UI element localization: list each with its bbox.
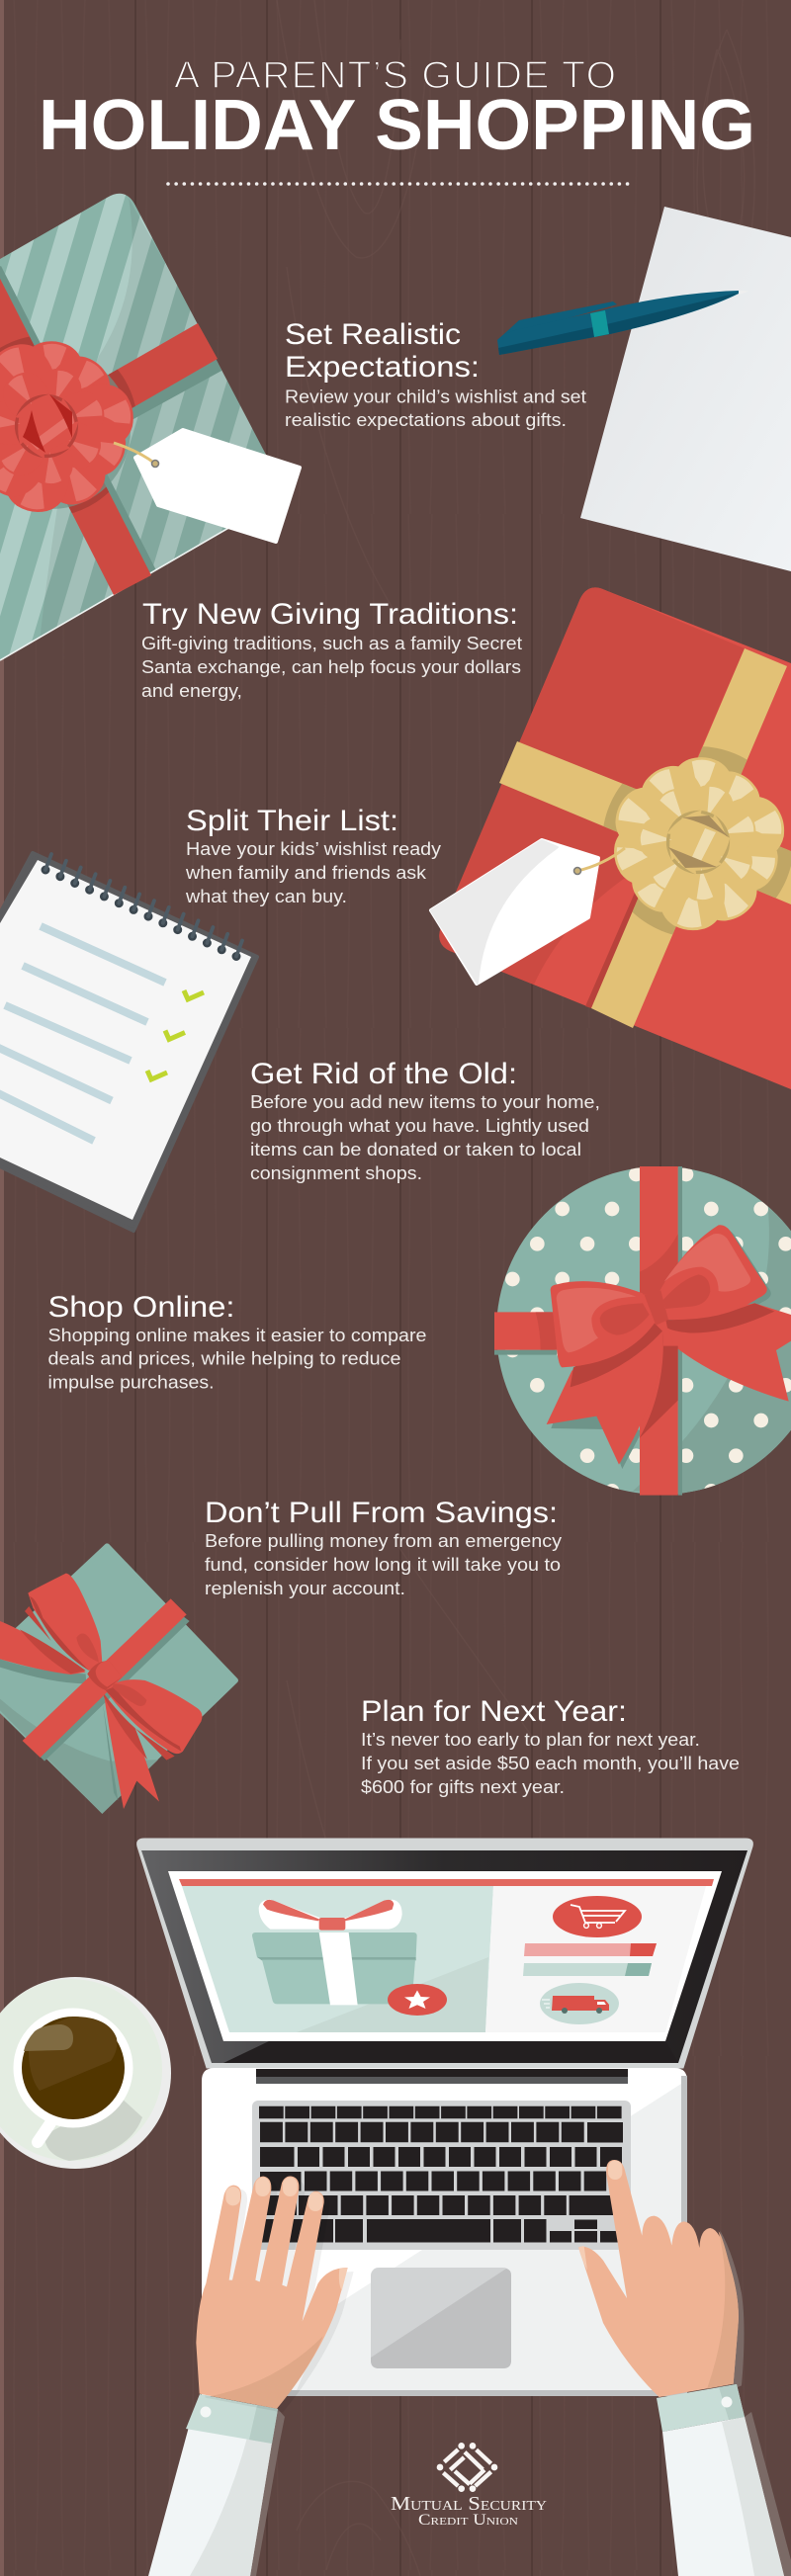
- lower bow loop: [106, 1679, 202, 1754]
- body text: Review your child’s wishlist and set: [285, 387, 586, 407]
- body text: items can be donated or taken to local: [250, 1140, 581, 1159]
- gift tag: [135, 430, 300, 542]
- body text: [185, 839, 441, 906]
- body text: If you set aside $50 each month, you’ll have: [361, 1754, 740, 1773]
- title: [39, 54, 755, 165]
- gift body: [439, 587, 791, 1089]
- gold ribbon: [499, 648, 791, 1028]
- gold bow: [606, 755, 791, 933]
- spiral binding: [45, 854, 242, 957]
- tip: set realistic expectations: [285, 318, 586, 430]
- logo mark: [437, 2443, 497, 2492]
- laptop: [137, 1839, 752, 2396]
- body text: Gift-giving traditions, such as a family Secret: [141, 634, 522, 653]
- heading: Don’t Pull From Savings:: [205, 1497, 558, 1529]
- cart icon badge: [553, 1896, 642, 1937]
- tip: try new giving traditions: [141, 598, 522, 701]
- heading: [285, 318, 480, 384]
- bow shadow: [668, 1232, 771, 1321]
- gift body: [0, 1546, 235, 1810]
- coffee cup on saucer: [0, 1977, 171, 2169]
- tag string: [114, 443, 155, 464]
- screen bezel: [141, 1850, 747, 2063]
- heading: Shop Online:: [47, 1291, 235, 1324]
- keyboard: [252, 2101, 631, 2250]
- body text: realistic expectations about gifts.: [285, 410, 567, 430]
- back loops: [25, 1606, 175, 1760]
- right cuff: [657, 2384, 745, 2432]
- hinge: [256, 2069, 628, 2084]
- right sleeve: [662, 2417, 784, 2576]
- body text: [205, 1531, 562, 1598]
- ribbon band: [23, 1598, 187, 1758]
- heading: Split Their List:: [186, 805, 398, 837]
- laptop screen frame: [137, 1839, 752, 2068]
- body text: impulse purchases.: [47, 1372, 214, 1392]
- tip: split their list: [185, 805, 441, 906]
- polka dots: [505, 1167, 791, 1499]
- gift body: [0, 194, 287, 660]
- gold ribbon shadow: [585, 870, 651, 1008]
- ribbon shadows: [0, 1616, 190, 1801]
- red gift with gold bow: [431, 587, 791, 1089]
- body text: Before you add new items to your home,: [250, 1092, 600, 1112]
- left ribbon tail: [0, 1621, 86, 1674]
- striped gift with red bow: [0, 194, 300, 660]
- cup: [14, 2009, 132, 2127]
- left sleeve: [148, 2427, 272, 2576]
- vertical and horizontal ribbon: [494, 1166, 678, 1496]
- trackpad: [371, 2268, 511, 2368]
- heading: Plan for Next Year:: [361, 1695, 627, 1728]
- left sleeve shadow: [250, 2409, 285, 2576]
- bow knot: [87, 1661, 122, 1690]
- paper sheet and pen: [497, 207, 791, 571]
- right ribbon tail: [665, 1303, 791, 1402]
- right hand: [578, 2160, 744, 2397]
- body text: It’s never too early to plan for next year.: [361, 1730, 700, 1750]
- left hand and sleeve: [148, 2177, 354, 2576]
- pen: [497, 291, 749, 355]
- screen right panel: [485, 1886, 706, 2032]
- heading: Set Realistic: [285, 318, 461, 351]
- logo name: Mutual Security: [391, 2493, 547, 2515]
- tip: get rid of the old: [250, 1058, 600, 1183]
- heading: Expectations:: [285, 351, 480, 384]
- body text: what they can buy.: [185, 887, 347, 906]
- tip: don't pull from savings: [205, 1497, 562, 1598]
- title line: holiday shopping: HOLIDAY SHOPPING: [39, 86, 755, 165]
- ribbon shadows: [494, 1166, 682, 1496]
- right sleeve shadow: [745, 2412, 791, 2576]
- body text: [141, 634, 522, 701]
- screen header bar: [179, 1879, 714, 1886]
- right hand and sleeve: [578, 2160, 791, 2576]
- notebook cover: [0, 853, 257, 1231]
- body text: deals and prices, while helping to reduce: [47, 1348, 401, 1368]
- body text: $600 for gifts next year.: [361, 1777, 565, 1797]
- heading: Try New Giving Traditions:: [142, 598, 518, 631]
- coffee: [22, 2017, 125, 2119]
- cup handle: [38, 2123, 50, 2142]
- notebook page: [0, 860, 251, 1220]
- body text: when family and friends ask: [185, 863, 427, 883]
- tip: plan for next year: [361, 1695, 740, 1797]
- paper: [580, 207, 791, 571]
- gift circle: [496, 1166, 791, 1495]
- checklist lines: [0, 926, 165, 1141]
- left bow loop: [551, 1281, 656, 1367]
- gift tag: [431, 840, 625, 984]
- body text: Have your kids’ wishlist ready: [186, 839, 441, 859]
- red bow: [0, 334, 138, 517]
- lower ribbon tail: [104, 1693, 159, 1809]
- progress bars: [523, 1943, 657, 1976]
- left ribbon tail: [547, 1328, 663, 1465]
- body text: go through what you have. Lightly used: [250, 1116, 589, 1136]
- body text: Shopping online makes it easier to compare: [47, 1326, 427, 1345]
- round polka dot gift: [494, 1166, 791, 1500]
- bow knot: [645, 1290, 668, 1326]
- heading: Get Rid of the Old:: [250, 1058, 517, 1090]
- notebook with checklist: [0, 853, 257, 1231]
- logo subname: Credit Union: [418, 2512, 518, 2529]
- body text: Santa exchange, can help focus your dollars: [141, 657, 521, 677]
- check marks: [147, 990, 204, 1079]
- upper bow loop: [28, 1574, 102, 1671]
- body text: replenish your account.: [205, 1579, 405, 1598]
- screen left panel: [182, 1886, 493, 2032]
- truck icon badge: [540, 1983, 619, 2024]
- title line: a parent's guide to: A PARENT’S GUIDE TO: [174, 54, 616, 97]
- tip: shop online: [47, 1291, 427, 1392]
- body text: [250, 1092, 600, 1183]
- body text: fund, consider how long it will take you to: [205, 1555, 561, 1575]
- small square gift with bow: [0, 1546, 235, 1816]
- body text: consignment shops.: [250, 1163, 422, 1183]
- right bow loop: [659, 1225, 767, 1320]
- body text: Before pulling money from an emergency: [205, 1531, 562, 1551]
- left cuff: [186, 2394, 278, 2444]
- left hand: [196, 2177, 354, 2413]
- body text: [285, 387, 586, 430]
- saucer: [0, 1977, 171, 2169]
- body text: and energy,: [141, 681, 242, 701]
- laptop base: [202, 2068, 687, 2396]
- body text: [361, 1730, 740, 1797]
- screen: [168, 1871, 722, 2041]
- dotted divider: [168, 182, 629, 186]
- body text: [47, 1326, 427, 1392]
- star badge: [388, 1984, 447, 2016]
- screen gift: [252, 1900, 417, 2005]
- red ribbon: [0, 269, 218, 595]
- mutual security credit union logo: [391, 2443, 547, 2529]
